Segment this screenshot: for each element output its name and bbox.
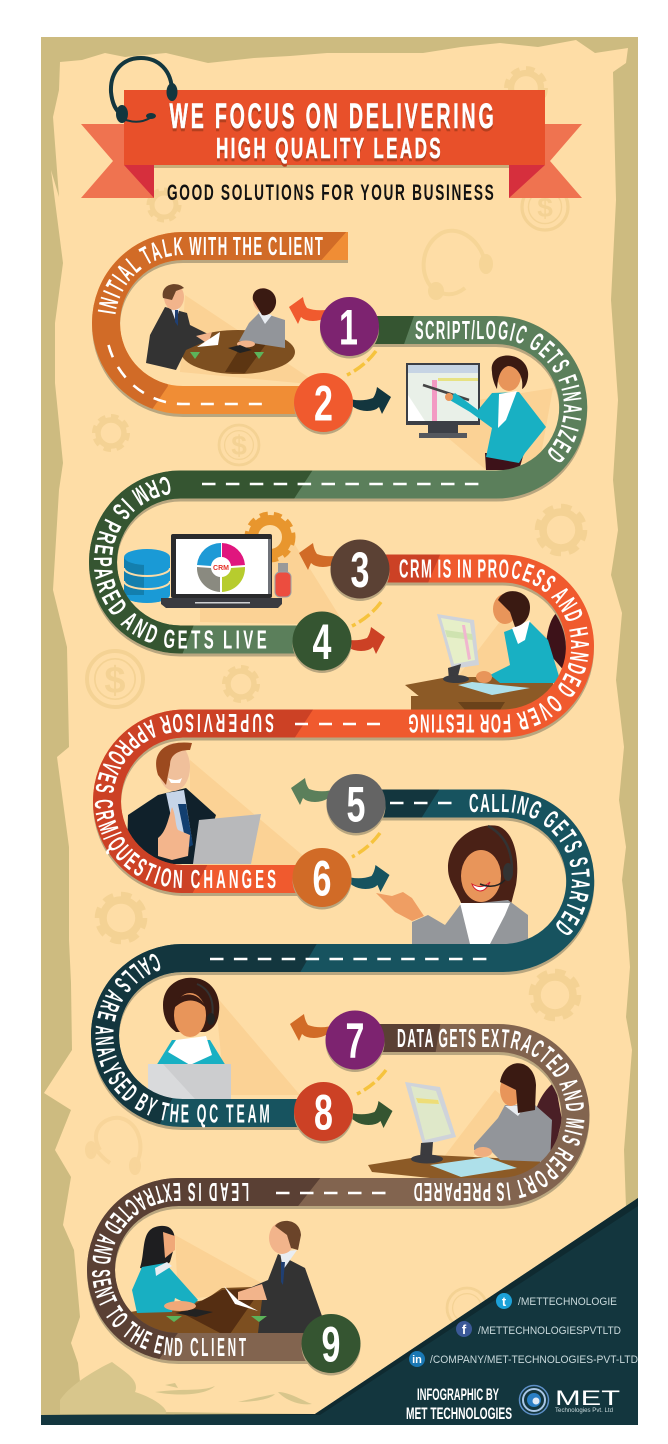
monitor	[437, 614, 479, 683]
label: step 3: CRM IS IN PROCESS AND HANDED OVER FOR TESTING	[400, 559, 589, 733]
monitor	[405, 1082, 456, 1164]
label: step 9: LEAD IS EXTRACTED AND SENT TO THE END CLIENT	[92, 1182, 248, 1356]
drinks	[190, 352, 264, 359]
arrow: 5 to scene	[291, 778, 338, 805]
light cone	[430, 1090, 520, 1175]
scene 2: woman presenting at monitor	[406, 356, 553, 470]
thumbs up hand	[158, 807, 190, 860]
facebook handle: /METTECHNOLOGIESPVTLTD	[478, 1325, 621, 1337]
watermark dollars: $	[104, 660, 126, 702]
watermark gears	[95, 69, 584, 1018]
scene 6: smiling call agent with headset	[376, 825, 528, 944]
arrow: 2 to scene	[344, 387, 391, 414]
light cone	[175, 1235, 265, 1300]
banner tails	[81, 124, 154, 198]
icon: facebook	[456, 1321, 472, 1337]
road: steps 2 and 4 green	[89, 316, 588, 656]
banner body	[124, 90, 545, 165]
table	[130, 1286, 279, 1334]
scene 4: woman working at desk	[405, 591, 567, 710]
desk	[405, 677, 553, 710]
number badge 5	[326, 774, 386, 836]
paper	[458, 682, 530, 695]
label: step 4: CRM IS PREPARED AND GETS LIVE	[94, 476, 266, 649]
arrow: 1 to scene	[289, 297, 336, 324]
icon: USB stick	[275, 563, 291, 597]
label: step 7: DATA GETS EXTRACTED AND MIS REPORT IS PREPARED	[398, 1028, 584, 1202]
label: step 8: CALLS ARE ANALYSED BY THE QC TEAM	[95, 954, 269, 1128]
icon: database	[124, 549, 170, 603]
icon: linkedin	[409, 1351, 425, 1367]
pointer	[423, 385, 469, 400]
CRM wheel: CRM	[213, 565, 229, 572]
scene 1: man and woman at round table	[146, 284, 320, 385]
watermark dollars: $	[537, 192, 553, 223]
laptop	[193, 814, 261, 864]
banner shadow	[154, 165, 509, 168]
arrow: 8 to scene	[346, 1101, 392, 1128]
headset	[197, 984, 213, 1018]
number badge 7: 7	[346, 1014, 364, 1070]
jacket	[412, 900, 528, 944]
road: steps 3 and 6 red-orange	[93, 554, 594, 896]
icon: gear	[247, 514, 293, 560]
number badge 3: 3	[351, 543, 369, 599]
watermark headsets	[87, 231, 491, 1173]
number badge 2: 2	[314, 376, 333, 432]
number badge 9: 9	[322, 1317, 340, 1373]
banner	[81, 90, 582, 205]
logo globe	[520, 1386, 548, 1414]
number badge 3	[330, 540, 390, 601]
credit text	[406, 1385, 512, 1423]
man	[146, 284, 212, 370]
hair and face	[163, 978, 219, 1032]
scene 9: handing over to end client	[130, 1221, 322, 1334]
road: steps 5 and 8 teal	[91, 790, 594, 1130]
arrow: 7 to scene	[290, 1014, 337, 1041]
notebook	[175, 1309, 213, 1317]
arrow: 4 to scene	[338, 627, 385, 654]
laptop	[148, 1064, 231, 1099]
shoulders	[156, 1040, 226, 1066]
bottom-right dark corner panel	[41, 1198, 638, 1425]
man	[238, 1221, 322, 1333]
label: step 1: INITIAL TALK WITH THE CLIENT	[98, 236, 323, 314]
scene 5: man with thumbs up and laptop	[127, 742, 320, 870]
credit text: MET TECHNOLOGIES	[406, 1404, 512, 1423]
logo wordmark: MET	[555, 1387, 620, 1410]
light cone	[190, 760, 320, 870]
icon: twitter	[496, 1293, 512, 1309]
number badge 8	[294, 1082, 353, 1144]
twitter handle: /METTECHNOLOGIE	[518, 1296, 617, 1308]
CRM wheel	[197, 543, 245, 592]
icon: linkedin: in	[412, 1354, 422, 1366]
woman	[445, 356, 546, 470]
icon: headset on banner	[111, 58, 178, 123]
scene 7: QC agent behind laptop	[148, 978, 300, 1099]
number badge 2	[294, 373, 353, 434]
icon: facebook: f	[462, 1322, 467, 1337]
number badge 1: 1	[339, 300, 358, 356]
road: step 1 orange, initial talk	[92, 232, 348, 417]
light cone	[200, 540, 345, 625]
woman	[474, 1063, 552, 1162]
social links	[409, 1293, 638, 1367]
tan paper blotches bottom left	[60, 1362, 312, 1414]
light cone	[415, 388, 553, 470]
yellow dashed connectors	[347, 351, 386, 1094]
number badge 6: 6	[313, 851, 331, 907]
monitor	[406, 363, 480, 438]
credit text: INFOGRAPHIC BY	[417, 1385, 499, 1404]
light cone	[215, 995, 300, 1095]
number badge 4: 4	[313, 615, 332, 671]
arrow: 6 to scene	[342, 865, 390, 892]
paper	[224, 1286, 258, 1311]
notebook	[228, 345, 252, 353]
arm and hand	[376, 892, 424, 921]
headset	[488, 826, 512, 870]
light cone	[180, 295, 320, 385]
label: step 2: SCRIPT/LOGIC GETS FINALIZED	[415, 320, 582, 462]
road: steps 7 and 9 brown	[87, 1024, 590, 1364]
number badge 8: 8	[314, 1085, 333, 1141]
number badge 4	[292, 612, 352, 673]
label: step 6: SUPERVISOR APPROVES CRM/QUESTION CHANGES	[94, 714, 276, 888]
number badge 6	[292, 848, 352, 910]
woman	[476, 591, 561, 683]
watermark icons	[87, 69, 584, 1328]
paper	[197, 332, 220, 347]
face	[461, 850, 501, 902]
watermark dollars	[87, 184, 568, 1328]
number badge 1	[320, 297, 379, 358]
arrow: 3 to scene	[299, 543, 346, 570]
paper	[430, 1157, 517, 1177]
man	[127, 742, 216, 864]
scene 3: CRM laptop, database, gear and USB	[124, 514, 345, 625]
laptop	[161, 534, 282, 608]
title line 2: HIGH QUALITY LEADS	[216, 133, 443, 165]
number badge 5: 5	[347, 777, 365, 833]
number badge 9	[302, 1314, 360, 1376]
watermark dollars: $	[231, 430, 247, 461]
hair	[448, 825, 517, 908]
number badge 7	[326, 1010, 384, 1072]
drinks	[166, 1316, 267, 1322]
logo tagline: Technologies Pvt. Ltd	[555, 1408, 613, 1414]
banner folds	[124, 165, 154, 198]
woman	[132, 1226, 198, 1313]
icon: twitter: t	[502, 1294, 507, 1309]
light cone	[440, 615, 560, 700]
scene 8: woman in grey at desk	[368, 1063, 562, 1178]
woman	[237, 288, 285, 348]
table	[181, 330, 295, 374]
bottom dark edge strip	[41, 1198, 638, 1415]
subtitle: GOOD SOLUTIONS FOR YOUR BUSINESS	[167, 180, 494, 205]
label: step 5: CALLING GETS STARTED	[470, 794, 590, 935]
desk	[368, 1155, 540, 1178]
chair	[536, 1082, 562, 1160]
linkedin handle: /COMPANY/MET-TECHNOLOGIES-PVT-LTD	[430, 1354, 638, 1366]
logo	[520, 1386, 620, 1414]
chair	[546, 612, 567, 673]
